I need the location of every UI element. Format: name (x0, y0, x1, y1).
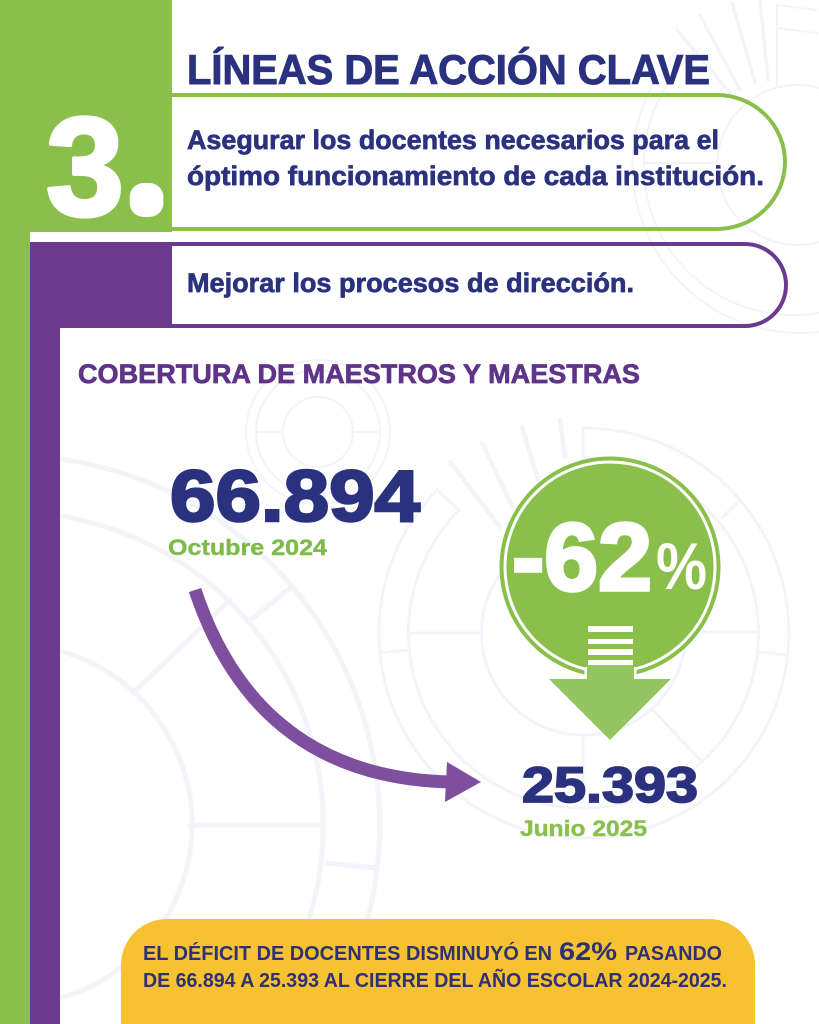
callout line 1: EL DÉFICIT DE DOCENTES DISMINUYÓ EN (143, 941, 552, 965)
curved arrow (195, 590, 481, 802)
stat label: October 2024: Octubre 2024 (168, 535, 328, 560)
stat label: June 2025: Junio 2025 (520, 816, 647, 841)
title: LÍNEAS DE ACCIÓN CLAVE (187, 45, 710, 93)
pill text: docentes line 1: Asegurar los docentes necesarios para el (187, 125, 719, 155)
pill text: dirección: Mejorar los procesos de dirección. (187, 268, 634, 298)
callout line 1: 62% (559, 938, 617, 966)
pill text: docentes line 2: óptimo funcionamiento de cada institución. (187, 161, 764, 191)
callout (121, 919, 755, 1024)
green side band (0, 0, 172, 1024)
section number: 3 (46, 88, 124, 245)
section heading: COBERTURA DE MAESTROS Y MAESTRAS (78, 359, 640, 389)
green pill panel (172, 95, 785, 229)
percentage badge (500, 456, 720, 678)
callout line 1 (143, 938, 722, 966)
badge percent sign: % (656, 529, 707, 603)
purple side band (30, 242, 172, 1024)
stat: June 2025 value: 25.393 (522, 757, 698, 813)
callout line 2: DE 66.894 A 25.393 AL CIERRE DEL AÑO ESCOLAR 2024-2025. (143, 969, 727, 992)
stat: October 2024 value: 66.894 (170, 457, 420, 537)
badge value: -62 (512, 504, 652, 611)
purple pill panel (172, 244, 786, 326)
callout line 1: PASANDO (625, 943, 722, 965)
section number: . (141, 168, 152, 212)
down arrow (549, 622, 671, 740)
